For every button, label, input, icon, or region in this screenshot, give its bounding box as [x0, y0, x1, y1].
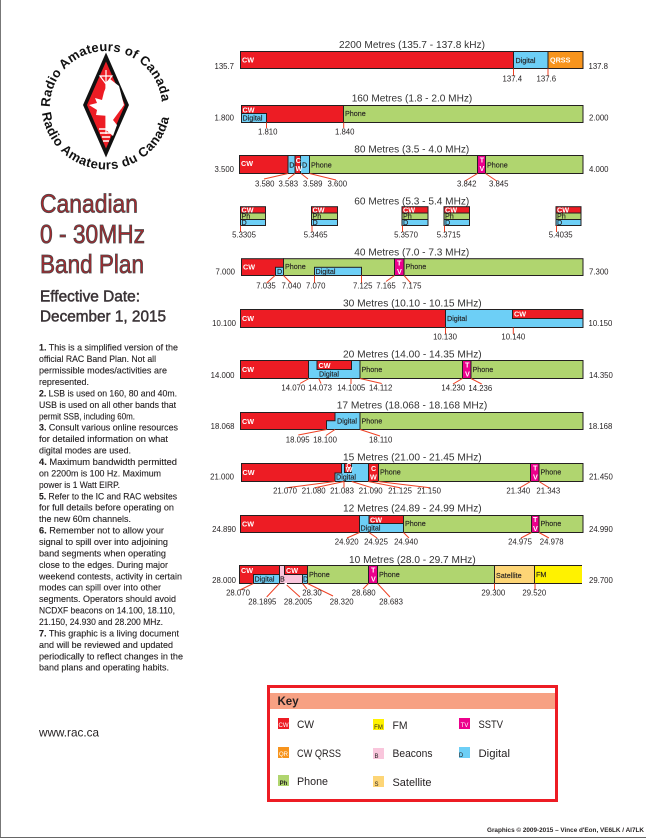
band bar: V — [371, 574, 376, 584]
band bar: Phone — [405, 519, 426, 528]
frequency labels: 21.340 — [506, 487, 531, 496]
frequency labels: 10.130 — [433, 332, 458, 341]
frequency labels: 28.320 — [330, 597, 354, 606]
band: 15 Metres — [210, 452, 614, 496]
frequency labels: 1.800 — [214, 114, 235, 123]
band bar: Phone — [311, 160, 332, 170]
band title: 60 Metres (5.3 - 5.4 MHz) — [354, 195, 469, 207]
logo text: bottom arc: Radio Amateurs du Canada — [42, 112, 170, 170]
frequency labels: 29.300 — [481, 588, 506, 597]
frequency labels: 28.683 — [379, 597, 403, 606]
text block: notes: close to the edges. During major — [39, 560, 168, 570]
band bar — [240, 52, 583, 68]
channel 5.3715: 5.3715 — [437, 231, 461, 240]
logo: Radio Amateurs of Canada — [40, 44, 170, 170]
frequency labels — [211, 371, 614, 393]
key: CW — [278, 718, 315, 731]
band bar: CW — [242, 314, 254, 323]
band bar: V — [533, 524, 538, 533]
key: Beacons: Beacons — [392, 748, 433, 760]
band bar: QRSS — [550, 56, 571, 64]
band bar: CW — [286, 566, 298, 575]
frequency labels: 24.940 — [394, 537, 419, 546]
band bar: CW — [318, 361, 331, 370]
channel 5.3305 — [232, 206, 266, 240]
frequency labels: 3.589 — [303, 180, 322, 189]
channel 5.4035: 5.4035 — [549, 231, 573, 240]
frequency labels: 137.6 — [537, 75, 556, 84]
frequency labels: 14.112 — [369, 383, 392, 392]
text block: notes: permit SSB, including 60m. — [39, 411, 135, 421]
band bar — [240, 515, 583, 533]
icon: diamond antenna with maple leaf — [85, 57, 127, 153]
band bar: D — [289, 160, 295, 170]
channel 5.3465: CW — [312, 206, 325, 214]
frequency labels: 137.8 — [588, 62, 608, 71]
text block: notes: power is 1 Watt EIRP. — [39, 480, 120, 490]
band bar: Phone — [380, 468, 401, 476]
frequency labels: 7.040 — [282, 282, 302, 291]
frequency labels: 24.978 — [540, 537, 564, 546]
frequency labels: 14.350 — [589, 371, 614, 380]
band bar: Digital — [316, 267, 336, 276]
band bar: T — [533, 515, 538, 524]
frequency labels: 7.070 — [306, 282, 326, 291]
band bar: CW — [370, 516, 382, 524]
band bar: V — [533, 472, 538, 482]
key: CW QRSS: CW QRSS — [297, 748, 341, 760]
website link text: www.rac.ca — [38, 726, 99, 740]
band title: 30 Metres (10.10 - 10.15 MHz) — [343, 298, 482, 310]
frequency labels: 3.500 — [214, 165, 235, 174]
key: Satellite — [373, 776, 432, 789]
frequency labels — [212, 525, 614, 546]
band bar: Satellite — [496, 571, 522, 580]
channel 5.4035: CW — [557, 206, 569, 214]
band bar: Digital — [242, 114, 263, 122]
channel 5.4035: Ph — [557, 212, 566, 221]
key: Beacons: B — [374, 754, 379, 760]
key: Digital: D — [459, 753, 464, 759]
band title: 2200 Metres (135.7 - 137.8 kHz) — [339, 39, 485, 51]
channel 5.3465: D — [312, 218, 318, 227]
band bar: Digital — [360, 524, 381, 532]
band bar: Phone — [362, 365, 382, 374]
band bar: T — [465, 360, 470, 370]
channel 5.3715: D — [445, 218, 450, 227]
band bar: C — [296, 156, 301, 165]
band bar: T — [480, 156, 485, 164]
band bar: T — [397, 258, 402, 268]
band bar — [240, 412, 583, 430]
band bar: W — [346, 465, 353, 474]
channel 5.4035 — [549, 206, 581, 240]
frequency labels: 2.000 — [589, 114, 609, 123]
band title: 12 Metres (24.89 - 24.99 MHz) — [343, 503, 482, 515]
band bar — [242, 461, 583, 482]
band bar: CW — [242, 365, 254, 374]
band bar: Digital — [336, 472, 356, 482]
band bar — [240, 156, 583, 174]
channel 5.3305: 5.3305 — [232, 231, 257, 240]
band bar: T — [533, 464, 538, 472]
frequency labels: 4.000 — [589, 165, 609, 174]
band bar: CW — [242, 56, 254, 64]
band title: 10 Metres (28.0 - 29.7 MHz) — [349, 554, 476, 566]
frequency labels: 28.070 — [226, 588, 251, 597]
key: CW QRSS: QR — [279, 752, 289, 758]
band bar: V — [465, 370, 470, 378]
frequency labels: 10.150 — [588, 319, 613, 328]
text block: notes: modes can spill over into other — [39, 583, 161, 593]
text block: notes: for full details before operating on — [39, 503, 174, 513]
band bar: CW — [241, 566, 253, 575]
band bar: B — [280, 574, 285, 584]
frequency labels: 10.140 — [501, 332, 526, 341]
band bar: Phone — [379, 570, 400, 579]
heading: Canadian 0 - 30MHz Band Plan: 0 - 30MHz — [40, 219, 145, 249]
band bar: CW — [242, 520, 254, 528]
band: 30 Metres — [212, 298, 613, 341]
key: Phone — [278, 775, 328, 788]
band bar: Phone — [309, 570, 330, 579]
text block: notes: 2. LSB is used on 160, 80 and 40m. — [39, 388, 177, 398]
band title: 17 Metres (18.068 - 18.168 MHz) — [337, 399, 487, 411]
frequency labels — [211, 422, 612, 444]
frequency labels: 24.975 — [508, 537, 533, 546]
text block: notes: periodically to reflect changes in the — [39, 651, 183, 661]
frequency labels: 137.4 — [503, 75, 523, 84]
band bar: Phone — [540, 468, 561, 476]
frequency labels: 14.000 — [211, 371, 235, 380]
band: 160 Metres — [214, 93, 609, 136]
frequency labels: 21.080 — [302, 487, 326, 496]
text block: notes: for detailed information on what — [39, 434, 169, 444]
frequency labels: 28.000 — [212, 576, 237, 585]
panel: key — [268, 686, 556, 800]
heading: effective date: December 1, 2015 — [40, 309, 166, 326]
text block: notes: represented. — [39, 377, 89, 387]
band bar: FM — [536, 570, 546, 579]
frequency labels: 14.073 — [308, 383, 332, 392]
band: 60 Metres — [232, 195, 581, 240]
frequency labels: 7.300 — [589, 268, 609, 276]
frequency labels: 7.165 — [376, 282, 396, 291]
band bar: D — [303, 574, 308, 584]
key: Beacons — [373, 748, 433, 760]
band bar — [240, 566, 582, 584]
frequency labels: 7.175 — [402, 282, 422, 291]
band bar: CW — [242, 417, 254, 426]
band bar: Phone — [472, 365, 493, 374]
frequency labels: 21.450 — [589, 472, 614, 482]
band: 2200 Metres — [214, 39, 608, 84]
frequency labels — [212, 319, 613, 341]
band bar: Digital — [337, 416, 357, 426]
band bar: W — [370, 472, 377, 482]
frequency labels: 10.100 — [212, 319, 237, 328]
text block: notes: official RAC Band Plan. Not all — [39, 354, 156, 364]
key: Phone: Ph — [280, 781, 288, 787]
text block: notes: 4. Maximum bandwidth permitted — [39, 457, 177, 467]
key: Digital — [459, 747, 510, 760]
channel 5.3305: Ph — [242, 212, 250, 221]
key: Satellite: S — [374, 782, 379, 788]
text block: notes: USB is used on all other bands that — [39, 400, 177, 410]
frequency labels: 21.090 — [359, 487, 383, 496]
heading: effective date — [40, 288, 166, 326]
frequency labels: 18.100 — [313, 435, 338, 444]
heading: effective date: Effective Date: — [40, 288, 140, 306]
frequency labels — [212, 576, 614, 606]
text block: notes — [38, 343, 183, 673]
band bar — [240, 360, 583, 378]
band: 20 Metres — [211, 348, 614, 393]
channel 5.3715: Ph — [445, 212, 454, 221]
frequency labels: 18.068 — [211, 422, 234, 431]
channel 5.3465: Ph — [312, 212, 321, 221]
band bar: CW — [514, 310, 526, 318]
frequency labels — [210, 472, 614, 496]
band bar: V — [480, 164, 484, 173]
band bar — [242, 106, 583, 122]
frequency labels: 1.810 — [258, 127, 278, 136]
band bar: Digital — [254, 574, 275, 584]
band bar: Digital — [516, 56, 536, 65]
band: 80 Metres — [214, 143, 609, 189]
channel 5.3570: CW — [403, 206, 415, 214]
text block: notes: band plans and operating habits. — [39, 663, 169, 673]
band bar: CW — [242, 468, 255, 477]
band: 17 Metres — [211, 399, 612, 444]
channel 5.3570: 5.3570 — [394, 231, 419, 240]
text block: notes: signal to spill over into adjoining — [39, 537, 168, 547]
heading: Canadian 0 - 30MHz Band Plan — [40, 189, 145, 279]
logo text: top arc: Radio Amateurs of Canada — [40, 44, 170, 106]
key header — [270, 693, 555, 709]
channel 5.3465: 5.3465 — [304, 231, 328, 240]
key: SSTV: TV — [461, 723, 468, 729]
frequency labels: 28.680 — [352, 588, 376, 597]
key: SSTV — [459, 718, 504, 731]
band bar: T — [371, 566, 376, 574]
band: 10 Metres — [212, 554, 614, 606]
key: CW: CW — [297, 719, 315, 731]
text block: notes: 1. This is a simplified version of the — [39, 343, 178, 353]
key: Phone: Phone — [297, 776, 328, 788]
band bar: CW — [242, 106, 255, 114]
text block: notes: permissible modes/activities are — [39, 366, 167, 376]
key: FM — [373, 719, 408, 732]
band bar — [242, 258, 583, 276]
text block: notes: on 2200m is 100 Hz. Maximum — [39, 468, 161, 478]
frequency labels: 3.845 — [489, 180, 509, 189]
band title: 80 Metres (3.5 - 4.0 MHz) — [354, 143, 469, 155]
channel 5.3305: CW — [242, 206, 254, 214]
band bar: Phone — [540, 519, 561, 528]
key: SSTV: SSTV — [478, 719, 504, 731]
band: 12 Metres — [212, 503, 614, 546]
frequency labels: 28.2005 — [284, 597, 313, 606]
frequency labels: 3.580 — [255, 180, 275, 189]
text block: notes: and will be reviewed and updated — [39, 640, 173, 650]
channel 5.3570: D — [403, 218, 408, 227]
frequency labels: 21.125 — [388, 487, 413, 496]
heading: Canadian 0 - 30MHz Band Plan: Band Plan — [40, 249, 144, 279]
band bar: Phone — [406, 262, 426, 271]
band bar: D — [277, 267, 282, 276]
text block: notes: 3. Consult various online resources — [39, 423, 179, 433]
frequency labels: 21.343 — [536, 487, 560, 496]
key: FM: FM — [374, 725, 383, 731]
frequency labels: 21.150 — [417, 487, 442, 496]
frequency labels: 24.920 — [335, 537, 359, 546]
band title: 40 Metres (7.0 - 7.3 MHz) — [354, 246, 469, 258]
frequency labels: 18.095 — [286, 435, 310, 444]
key: CW: CW — [278, 723, 289, 729]
key header: Key — [278, 696, 299, 708]
channel 5.4035: D — [557, 218, 562, 227]
frequency labels: 14.070 — [281, 383, 306, 392]
text block: notes: 5. Refer to the IC and RAC websites — [39, 491, 178, 501]
band bar: Phone — [487, 160, 508, 170]
frequency labels: 135.7 — [214, 62, 234, 71]
frequency labels: 21.083 — [330, 487, 354, 496]
channel 5.3465 — [304, 206, 338, 240]
frequency labels: 28.30 — [302, 588, 322, 597]
band title: 160 Metres (1.8 - 2.0 MHz) — [352, 93, 472, 105]
frequency labels: 18.110 — [369, 435, 393, 444]
frequency labels: 21.070 — [273, 487, 298, 496]
frequency labels: 3.583 — [279, 180, 298, 189]
band bar: CW — [243, 262, 255, 272]
channel 5.3715: CW — [445, 206, 457, 214]
frequency labels: 7.035 — [256, 282, 276, 291]
band bar: V — [397, 267, 402, 276]
band bar: Phone — [362, 416, 382, 426]
band bar: CW — [241, 159, 253, 168]
band bar: C — [346, 461, 351, 470]
frequency labels: 3.600 — [328, 180, 348, 189]
key: FM: FM — [392, 720, 408, 732]
frequency labels: 1.840 — [335, 127, 355, 136]
channel 5.3305: D — [242, 218, 247, 227]
key: Satellite: Satellite — [392, 777, 432, 789]
text block: notes: 21.150, 24.930 and 28.200 MHz. — [39, 617, 163, 627]
text block: notes: band segments when operating — [39, 548, 166, 558]
text block: notes: 6. Remember not to allow your — [39, 526, 164, 536]
frequency labels: 24.990 — [589, 525, 614, 534]
frequency labels: 7.000 — [215, 268, 236, 276]
channel 5.3570 — [394, 206, 428, 240]
frequency labels — [214, 165, 609, 189]
text block: notes: segments. Operators should avoid — [39, 594, 176, 604]
frequency labels: 24.925 — [364, 537, 389, 546]
frequency labels: 14.230 — [441, 383, 466, 392]
frequency labels: 21.000 — [210, 472, 235, 482]
frequency labels — [214, 114, 609, 136]
band bar: D — [302, 160, 307, 170]
text block: notes: the new 60m channels. — [39, 514, 131, 524]
text block: notes: weekend contests, activity in certain — [38, 571, 182, 581]
key: CW QRSS — [278, 747, 341, 760]
frequency labels — [214, 62, 608, 84]
band: 40 Metres — [215, 246, 609, 291]
frequency labels: 14.236 — [468, 384, 492, 393]
frequency labels: 28.1895 — [248, 597, 277, 606]
band title: 15 Metres (21.00 - 21.45 MHz) — [343, 452, 482, 464]
channel 5.3570: Ph — [403, 212, 412, 221]
frequency labels: 14.1005 — [337, 383, 366, 392]
band title: 20 Metres (14.00 - 14.35 MHz) — [343, 348, 482, 360]
band bar: W — [296, 164, 302, 173]
band bar: Digital — [447, 314, 467, 323]
key: Digital: Digital — [478, 748, 510, 760]
band bar: Phone — [345, 109, 366, 118]
channel 5.3715 — [437, 206, 470, 240]
band bar: C — [371, 464, 376, 473]
band bar — [240, 310, 583, 328]
band bar: Digital — [319, 370, 339, 378]
text block: notes: NCDXF beacons on 14.100, 18.110, — [39, 606, 175, 616]
frequency labels: 18.168 — [588, 422, 612, 431]
heading: Canadian 0 - 30MHz Band Plan: Canadian — [40, 189, 138, 219]
frequency labels — [215, 268, 609, 291]
text block: notes: digital modes are used. — [39, 446, 131, 456]
band bar: Phone — [285, 262, 306, 271]
frequency labels: 3.842 — [457, 180, 476, 189]
text block: notes: 7. This graphic is a living document — [39, 628, 180, 638]
frequency labels: 7.125 — [353, 282, 373, 291]
frequency labels: 24.890 — [212, 525, 237, 534]
frequency labels: 29.700 — [589, 576, 614, 585]
frequency labels: 29.520 — [522, 588, 547, 597]
